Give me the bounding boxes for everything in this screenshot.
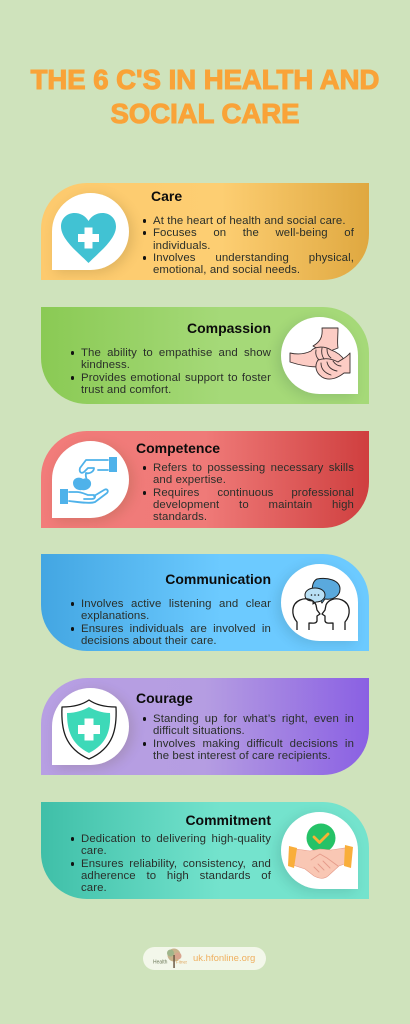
text: compassion points <box>71 347 271 396</box>
icon: holding hands <box>281 317 358 394</box>
icon: shield with cross <box>52 688 129 765</box>
heading: commitment: Commitment <box>185 812 271 828</box>
heading: competence: Competence <box>136 440 220 456</box>
panel: competence <box>41 431 369 528</box>
text: communication points: decisions about their care. <box>81 635 217 647</box>
text: courage points <box>143 713 354 762</box>
text: courage points: Involves making difficult decisions in <box>153 738 354 750</box>
panel: care <box>41 183 369 280</box>
title: THE 6 C'S IN HEALTH AND <box>31 64 379 95</box>
text: communication points <box>71 598 271 647</box>
text: competence points <box>143 462 354 523</box>
text: care points <box>143 215 354 276</box>
text: competence points: Refers to possessing necessary skills <box>153 462 354 474</box>
text: communication points: Involves active listening and clear <box>81 598 271 610</box>
heading: compassion: Compassion <box>187 320 271 336</box>
text: care points: Focuses on the well-being of <box>153 227 354 239</box>
text: courage points: the best interest of care recipients. <box>153 750 331 762</box>
title <box>30 64 379 129</box>
icon: handshake with check badge <box>281 812 358 889</box>
text: care points: At the heart of health and social care. <box>153 215 346 227</box>
text: competence points: Requires continuous professional <box>153 487 354 499</box>
text: competence points: standards. <box>153 511 207 523</box>
icon: heart with cross <box>52 193 129 270</box>
heading: care: Care <box>151 188 182 204</box>
heading: courage: Courage <box>136 690 193 706</box>
text: commitment points: adherence to high standards of <box>81 870 271 882</box>
text: compassion points: kindness. <box>81 359 130 371</box>
text: communication points: Ensures individuals are involved in <box>81 623 271 635</box>
text: competence points: development to maintain high <box>153 499 354 511</box>
panel: commitment <box>41 802 369 899</box>
heading: communication: Communication <box>165 571 271 587</box>
text: compassion points: The ability to empathise and show <box>81 347 271 359</box>
icon: two heads talking <box>281 564 358 641</box>
text: commitment points: care. <box>81 845 107 857</box>
icon: tree logo: Health <box>153 960 168 966</box>
text: courage points: Standing up for what’s right, even in <box>153 713 354 725</box>
text: care points: emotional, and social needs. <box>153 264 300 276</box>
text: compassion points: Provides emotional support to foster <box>81 372 271 384</box>
text: care points: individuals. <box>153 240 211 252</box>
text: courage points: difficult situations. <box>153 725 245 737</box>
text: commitment points: Ensures reliability, consistency, and <box>81 858 271 870</box>
text: commitment points: Dedication to delivering high-quality <box>81 833 271 845</box>
text: competence points: and expertise. <box>153 474 226 486</box>
text: care points: Involves understanding physical, <box>153 252 354 264</box>
text: communication points: explanations. <box>81 610 149 622</box>
website address: uk.hfonline.org <box>193 953 255 964</box>
panel: compassion <box>41 307 369 404</box>
icon: tree logo <box>153 948 187 968</box>
text: commitment points <box>71 833 271 894</box>
panel: communication <box>41 554 369 651</box>
panel: courage <box>41 678 369 775</box>
footer logo pill <box>143 947 266 970</box>
text: commitment points: care. <box>81 882 107 894</box>
text: compassion points: trust and comfort. <box>81 384 171 396</box>
icon: hands passing a heart <box>52 441 129 518</box>
title: SOCIAL CARE <box>111 98 299 129</box>
